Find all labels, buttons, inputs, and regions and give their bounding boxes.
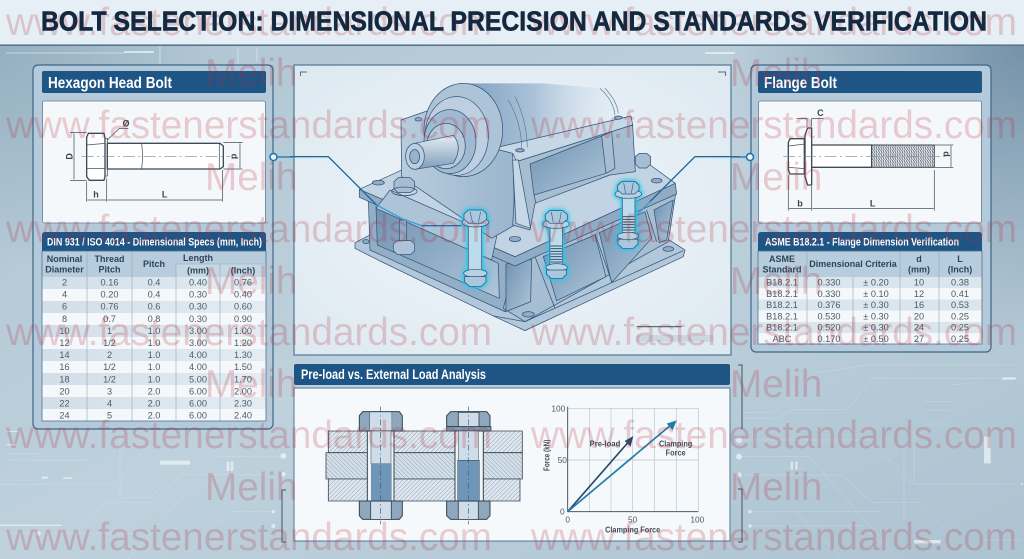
arrow: pre-load [568,436,633,512]
table rows: 6.00 [189,386,207,396]
table rows: B18.2.1 [766,323,798,333]
right body side [503,192,676,322]
icon: hexagon bolt technical drawing: Ø [122,119,129,129]
table rows: 0.25 [951,334,969,344]
table rows: 1.0 [148,350,160,360]
heading: hexagon head bolt [42,71,266,93]
table rows: 5.00 [189,374,207,384]
table rows: 8 [62,314,67,324]
watermark: site address and name: Melih [730,260,822,303]
table rows: ± 0.10 [863,289,889,299]
foot plate [355,235,685,331]
highlighted bolt 2 [543,211,569,279]
table rows: 6.00 [189,398,207,408]
table rows [758,251,982,344]
table rows: 2.0 [148,411,160,421]
table rows: 1.0 [148,338,160,348]
icon: flange bolt technical drawing: d [941,151,951,157]
bolted joint cross-section [326,407,522,524]
line chart: force vs clamping force: Pre-load [590,438,620,448]
table rows: 10 [59,326,70,336]
machine base with bearing block [290,83,740,342]
table rows: B18.2.1 [766,300,798,310]
table rows: ± 0.30 [863,323,889,333]
connector: right panel to machine [731,154,754,160]
table rows: 3.00 [189,338,207,348]
table rows: 14 [59,350,70,360]
table rows: 6 [62,302,67,312]
line chart: force vs clamping force: 0 [565,514,570,524]
table rows: 0.530 [818,311,840,321]
table rows: ± 0.50 [863,334,889,344]
watermark: site address and name: www.fastenerstandards.com [5,311,492,354]
watermark: site address and name: www.fastenerstandards.com [5,208,492,251]
bearing pedestal [401,110,515,238]
table rows: 1 [107,326,112,336]
table rows: 27 [914,334,924,344]
table rows: 0.76 [234,278,252,288]
table rows: ± 0.30 [863,311,889,321]
table rows: 2 [107,350,112,360]
table rows: 4 [107,398,112,408]
table rows: 1.0 [148,326,160,336]
table: ASME B18.2.1 [758,232,982,344]
table rows: 2.30 [234,398,252,408]
table rows: 1.20 [234,338,252,348]
table rows: 10 [914,278,924,288]
line chart: force vs clamping force: Clamping Force [605,524,660,534]
table rows: 0.330 [818,278,840,288]
table column headers: (Inch) [948,264,972,274]
icon: hexagon bolt technical drawing: d [230,154,240,159]
top plate [359,183,677,266]
table rows: 22 [59,398,70,408]
table column headers: Dimensional Criteria [809,259,898,269]
watermark: site address and name: Melih [730,363,822,406]
table rows: 2.0 [148,386,160,396]
table rows: 1.00 [234,326,252,336]
heading: flange bolt [758,71,982,93]
table rows: 0.8 [148,314,160,324]
table rows: 1.50 [234,362,252,372]
table rows: 0.41 [951,289,969,299]
table rows: 1.0 [148,362,160,372]
watermark: site address and name: www.fastenerstandards.com [5,516,492,559]
icon: hexagon bolt technical drawing: D [64,153,74,160]
watermark: site address and name: www.fastenerstandards.com [530,414,1017,457]
table rows: 0.76 [101,302,118,312]
watermark: site address and name: Melih [205,466,297,509]
line chart: force vs clamping force: 50 [628,514,638,524]
table rows: 16 [914,300,924,310]
watermark: site address and name: www.fastenerstandards.com [530,516,1017,559]
table rows: 4.00 [189,362,207,372]
table column headers: Diameter [45,264,84,274]
line chart: force vs clamping force: 50 [558,455,567,465]
line chart: force vs clamping force [541,404,705,534]
line chart: force vs clamping force: 100 [690,514,705,524]
heading: flange bolt: Flange Bolt [764,75,837,92]
title band [0,0,1024,46]
left body side [368,198,517,312]
panel: machine illustration [290,65,740,355]
table rows: 0.60 [234,302,252,312]
leader lines [290,157,462,226]
table rows: 0.40 [189,278,207,288]
highlighted bolt 1 [462,210,489,287]
table rows: 20 [59,386,70,396]
table column headers: Pitch [143,259,165,269]
panel: hexagon head bolt [33,65,273,429]
table rows: B18.2.1 [766,278,798,288]
table rows: 4 [62,290,67,300]
watermark: site address and name: Melih [730,466,822,509]
table heading: ASME B18.2.1 - Flange Dimension Verification [765,236,959,248]
table rows: 0.30 [189,314,207,324]
left bolt [359,407,402,524]
table rows: 0.7 [103,314,116,324]
watermark: site address and name: www.fastenerstandards.com [530,104,1017,147]
line chart: force vs clamping force: 0 [560,507,565,517]
table: DIN 931 / ISO 4014 [42,232,266,421]
bracket left of load panel [282,490,286,542]
table rows: 20 [914,311,924,321]
icon: hexagon bolt technical drawing: h [93,190,99,200]
table rows: 1.0 [148,374,160,384]
table rows: 16 [59,362,70,372]
table rows: 0.4 [148,290,160,300]
table rows: ± 0.20 [863,278,889,288]
table rows: 2.00 [234,386,252,396]
table column headers: d [916,254,922,264]
table rows: 3 [107,386,112,396]
table column headers: ASME [769,254,795,264]
highlighted bolt 3 [615,181,642,248]
table heading [42,232,266,251]
table column headers [758,251,982,277]
table rows: 4.00 [189,350,207,360]
line chart: force vs clamping force: Force (kN) [541,439,551,471]
table rows: ± 0.30 [863,300,889,310]
table rows: 0.53 [951,300,969,310]
flange bolt drawing card [758,101,982,223]
icon: hexagon bolt technical drawing: L [162,190,168,200]
drum rings and shaft [424,83,503,177]
table rows: 1/2 [103,362,116,372]
watermark: site address and name: www.fastenerstandards.com [5,104,492,147]
line chart: force vs clamping force: Force [666,448,686,458]
table rows: 2.0 [148,398,160,408]
circuit lines bottom left [0,431,286,559]
table rows: 12 [914,289,924,299]
table column headers: (mm) [908,264,930,274]
table rows: 0.25 [951,311,969,321]
table rows: 12 [59,338,70,348]
bracket right of load panel [738,365,742,542]
table rows: 0.330 [818,289,840,299]
circuit lines top [6,46,735,65]
icon: hexagon bolt technical drawing [64,119,243,202]
table rows: 6.00 [189,411,207,421]
watermark: site address and name: www.fastenerstandards.com [5,1,492,44]
table column headers: Nominal [47,254,82,264]
table rows: 3.00 [189,326,207,336]
heading: hexagon head bolt: Hexagon Head Bolt [48,75,172,92]
table rows: 0.4 [148,278,160,288]
table rows: 2.40 [234,411,252,421]
watermark: site address and name: Melih [730,156,822,199]
line chart: force vs clamping force: 100 [551,404,566,414]
watermark: site address and name: Melih [205,260,297,303]
heading: pre-load analysis: Pre-load vs. External Load Analysis [301,367,486,382]
table rows: 0.25 [951,323,969,333]
arrow: clamping force [568,420,677,512]
table rows: 0.30 [189,290,207,300]
table rows: 5 [107,411,112,421]
table rows: 0.376 [818,300,840,310]
icon: flange bolt technical drawing: b [797,199,803,209]
table rows: 0.16 [101,278,118,288]
table column headers: L [957,254,963,264]
plain bolts [394,178,415,193]
watermark: site address and name: Melih [205,363,297,406]
hexagon bolt drawing card [42,101,266,223]
table rows: B18.2.1 [766,289,798,299]
table heading [758,232,982,251]
table column headers [42,251,266,277]
heading: pre-load analysis [294,364,730,385]
table heading: DIN 931 / ISO 4014 - Dimensional Specs (mm, Inch) [47,236,262,248]
table rows: 0.170 [818,334,840,344]
table column headers: (mm) [187,266,209,276]
table rows: ABC [773,334,792,344]
table column headers: Thread [94,254,125,264]
table rows: 1/2 [103,374,116,384]
table rows: 18 [59,374,70,384]
table column headers: Length [183,253,213,263]
table rows [42,251,266,421]
table rows: 1.70 [234,374,252,384]
table column headers: Standard [762,264,802,274]
panel: pre-load analysis [294,364,730,541]
icon: flange bolt technical drawing: C [817,108,824,118]
table rows: 0.38 [951,278,969,288]
table rows: 0.6 [148,302,160,312]
table rows: 0.90 [234,314,252,324]
table rows: 0.20 [101,290,118,300]
drum body [463,83,618,177]
watermark: site address and name: www.fastenerstandards.com [530,1,1017,44]
connector: left panel to machine [270,154,294,160]
right bolt [447,407,491,524]
table rows: 24 [59,411,70,421]
table rows: 2 [62,278,67,288]
table rows: 24 [914,323,924,333]
table rows: 1/2 [103,338,116,348]
table column headers: (Inch) [231,266,255,276]
circuit lines bottom right [734,365,1023,557]
watermark: site address and name: www.fastenerstandards.com [5,414,492,457]
table rows: 0.40 [234,290,252,300]
icon: flange bolt technical drawing [783,108,953,211]
panel: flange bolt [751,65,991,352]
table rows: 0.520 [818,323,840,333]
table column headers: Pitch [98,264,121,274]
watermark: site address and name: www.fastenerstandards.com [530,208,1017,251]
table rows: 1.30 [234,350,252,360]
watermark: site address and name: Melih [205,156,297,199]
table rows: 0.30 [189,302,207,312]
table rows: B18.2.1 [766,311,798,321]
watermark: site address and name: Melih [730,52,822,95]
watermark: site address and name: Melih [205,52,297,95]
line chart: force vs clamping force: Clamping [659,438,692,448]
icon: flange bolt technical drawing: L [870,199,876,209]
watermark: site address and name: www.fastenerstandards.com [530,311,1017,354]
